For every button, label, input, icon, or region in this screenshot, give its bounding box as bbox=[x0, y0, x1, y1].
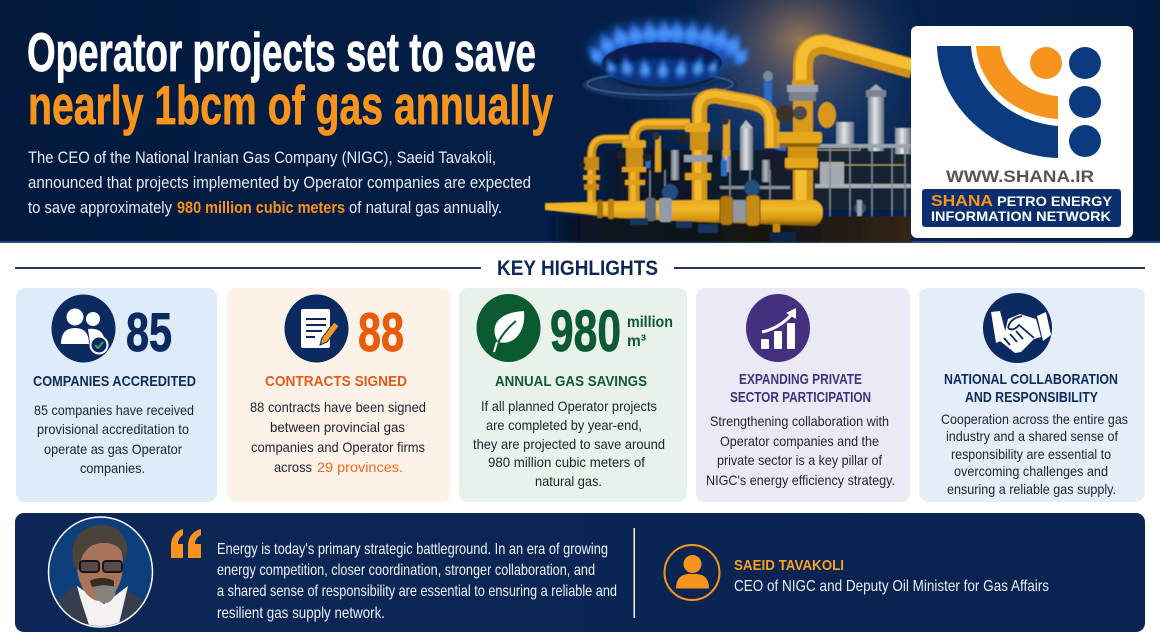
description bbox=[34, 402, 194, 476]
description: ensuring a reliable gas supply. bbox=[947, 481, 1116, 497]
stat: 980 million m3: million bbox=[627, 314, 673, 331]
attribution: SAEID TAVAKOLI bbox=[734, 557, 844, 574]
panel: quote banner bbox=[15, 513, 1145, 632]
description: responsibility are essential to bbox=[951, 446, 1111, 462]
description: Operator companies and the bbox=[720, 433, 879, 449]
icon: document and pencil bbox=[284, 294, 348, 362]
panel: national collaboration and responsibility bbox=[919, 288, 1145, 502]
description: overcoming challenges and bbox=[954, 463, 1108, 479]
description: they are projected to save around bbox=[473, 436, 665, 452]
stat: 88: 88 bbox=[358, 301, 404, 363]
description: companies. bbox=[80, 460, 145, 476]
stat: 980 million m3: 980 bbox=[550, 299, 621, 364]
label: SECTOR PARTICIPATION bbox=[730, 389, 871, 406]
intro paragraph bbox=[28, 148, 531, 217]
panel: annual gas savings bbox=[459, 288, 687, 502]
quote text: resilient gas supply network. bbox=[217, 605, 385, 622]
Shana network badge: PETRO ENERGY bbox=[997, 193, 1113, 209]
stat: 980 million m3: m³ bbox=[627, 333, 646, 350]
attribution: CEO of NIGC and Deputy Oil Minister for Gas Affairs bbox=[734, 578, 1049, 595]
intro paragraph: The CEO of the National Iranian Gas Company (NIGC), Saeid Tavakoli, bbox=[28, 148, 496, 167]
icon: Shana logo mark bbox=[937, 46, 1101, 158]
label: AND RESPONSIBILITY bbox=[965, 389, 1098, 406]
description: natural gas. bbox=[535, 473, 602, 489]
description: 29 provinces. bbox=[317, 459, 403, 475]
title: nearly 1bcm of gas annually bbox=[28, 74, 553, 136]
quote text: energy competition, closer coordination, stronger collaboration, and bbox=[217, 562, 595, 579]
attribution bbox=[734, 557, 1049, 595]
description: companies and Operator firms bbox=[251, 439, 425, 455]
main horizontal pipe bbox=[545, 195, 823, 241]
quote text: Energy is today's primary strategic battleground. In an era of growing bbox=[217, 541, 608, 558]
description: operate as gas Operator bbox=[44, 441, 182, 457]
label: CONTRACTS SIGNED bbox=[265, 373, 407, 390]
description: provisional accreditation to bbox=[37, 421, 189, 437]
panel: Shana logo card bbox=[911, 26, 1133, 238]
icon: leaf bbox=[476, 294, 540, 362]
description: industry and a shared sense of bbox=[946, 428, 1118, 444]
quote text: a shared sense of responsibility are essential to ensuring a reliable and bbox=[217, 583, 617, 600]
description: between provincial gas bbox=[270, 419, 405, 435]
ground bbox=[545, 216, 911, 242]
label: COMPANIES ACCREDITED bbox=[33, 373, 196, 390]
icon: blue valve knob bbox=[763, 71, 773, 81]
label bbox=[730, 371, 871, 406]
title bbox=[27, 21, 553, 136]
description: 85 companies have received bbox=[34, 402, 194, 418]
description: Cooperation across the entire gas bbox=[941, 411, 1128, 427]
label: EXPANDING PRIVATE bbox=[739, 371, 862, 388]
description: If all planned Operator projects bbox=[481, 398, 657, 414]
label: NATIONAL COLLABORATION bbox=[944, 371, 1118, 388]
heading: key highlights: KEY HIGHLIGHTS bbox=[497, 257, 658, 280]
icon: gas burner flames bbox=[582, 18, 754, 100]
icon: person bbox=[664, 545, 720, 600]
Shana network badge: INFORMATION NETWORK bbox=[931, 208, 1111, 224]
description bbox=[250, 399, 426, 475]
description: across bbox=[274, 459, 312, 475]
Shana network badge: SHANA bbox=[931, 193, 993, 210]
title: Operator projects set to save bbox=[27, 21, 536, 83]
valves and flanges bbox=[578, 80, 836, 190]
blue pipework bbox=[648, 78, 786, 176]
description: are completed by year-end, bbox=[486, 417, 642, 433]
intro paragraph: announced that projects implemented by Operator companies are expected bbox=[28, 173, 531, 192]
panel: contracts signed bbox=[227, 288, 450, 502]
refinery structures bbox=[590, 84, 911, 224]
intro paragraph: 980 million cubic meters bbox=[177, 198, 345, 217]
description bbox=[473, 398, 665, 489]
description: NIGC's energy efficiency strategy. bbox=[706, 472, 895, 488]
portrait of Saeid Tavakoli bbox=[48, 517, 152, 628]
quote text bbox=[217, 541, 617, 622]
icon: people with check bbox=[52, 294, 116, 362]
intro paragraph: of natural gas annually. bbox=[349, 198, 502, 217]
header banner bbox=[0, 0, 1160, 243]
yellow pipeline risers bbox=[590, 41, 912, 202]
scene: gas burner and pipeline bbox=[545, 0, 960, 242]
description: private sector is a key pillar of bbox=[717, 452, 882, 468]
panel: companies accredited bbox=[16, 288, 217, 502]
panel: expanding private sector participation bbox=[696, 288, 910, 502]
stat: 85: 85 bbox=[126, 301, 172, 363]
icon: quotation mark bbox=[171, 529, 201, 558]
Shana network badge bbox=[922, 189, 1121, 227]
description bbox=[706, 413, 895, 488]
label: ANNUAL GAS SAVINGS bbox=[495, 373, 647, 390]
intro paragraph: to save approximately bbox=[28, 198, 172, 217]
icon: handshake bbox=[983, 293, 1052, 363]
icon: growth chart bbox=[746, 294, 810, 362]
description bbox=[941, 411, 1128, 497]
description: 980 million cubic meters of bbox=[488, 454, 645, 470]
description: Strengthening collaboration with bbox=[710, 413, 889, 429]
description: 88 contracts have been signed bbox=[250, 399, 426, 415]
label bbox=[944, 371, 1118, 406]
website address: WWW.SHANA.IR bbox=[946, 167, 1094, 186]
